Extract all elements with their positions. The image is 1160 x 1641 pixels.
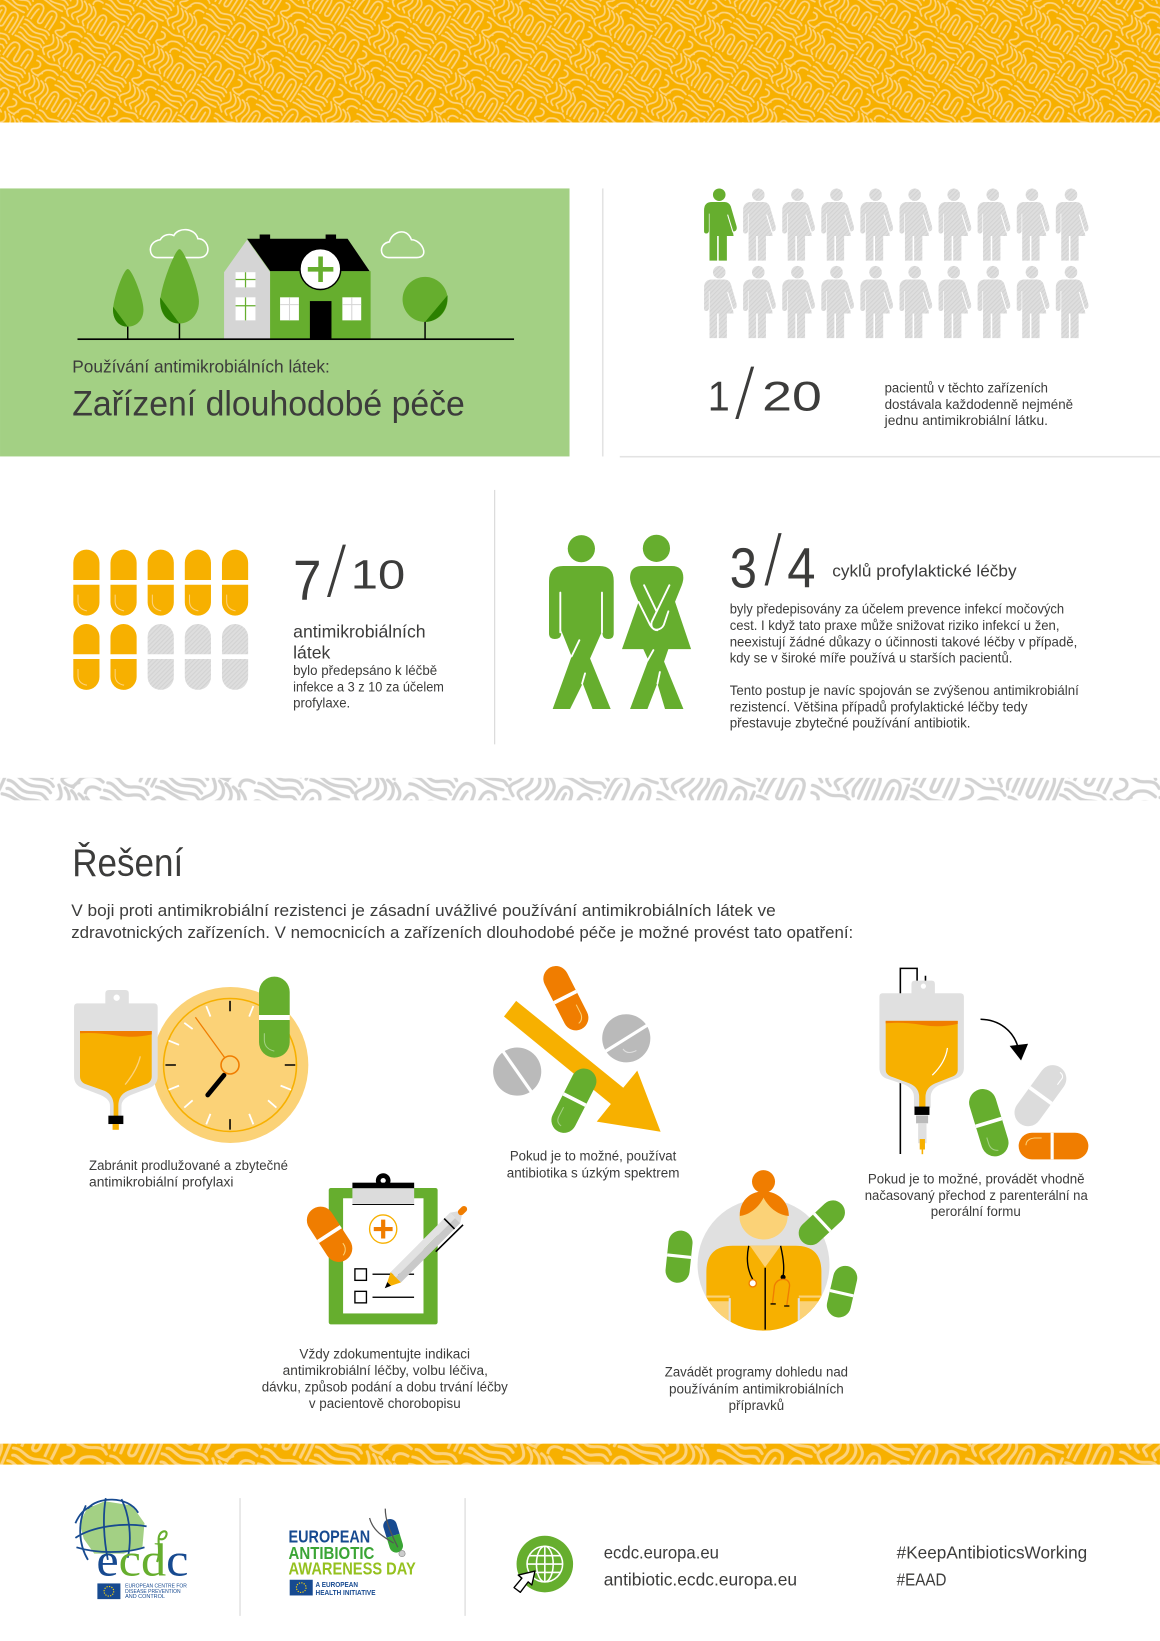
stat: 1/20: / [733,355,756,433]
logo: ECDC: AND CONTROL [125,1594,165,1600]
text: prophylaxis description: cest. I když tato praxe může snižovat riziko infekcí u žen, [730,617,1059,633]
icon: care home illustration [77,230,514,340]
title: Zařízení dlouhodobé péče [72,384,465,424]
pictogram: 7 of 10 pills [73,550,248,690]
icon: IV bag with clock [74,977,308,1143]
caption: stewardship: používáním antimikrobiálních [669,1380,844,1396]
stat: 7/10: 10 [351,551,405,597]
text: 7/10 description: látek [293,642,330,662]
caption: stewardship [665,1364,848,1413]
top pattern band [0,0,1160,122]
logo: ECDC: EUROPEAN CENTRE FOR [125,1584,187,1590]
text: 1/20 description [884,380,1073,428]
stat: 1/20: 1 [708,372,730,419]
stat: 7/10 [293,533,405,612]
stat: 7/10: / [325,533,348,611]
caption: narrow spectrum: antibiotika s úzkým spektrem [507,1164,679,1180]
stat: 3/4 [730,523,816,600]
text: web links: ecdc.europa.eu [604,1542,719,1562]
logo: ECDC: ecdc [96,1535,188,1586]
caption: documentation: antimikrobiální léčby, volbu léčiva, [283,1362,488,1378]
text: 7/10 description: profylaxe. [293,694,350,710]
caption: narrow spectrum: Pokud je to možné, používat [510,1148,676,1164]
text: web links: antibiotic.ecdc.europa.eu [604,1570,797,1590]
text: prophylaxis description: byly předepisovány za účelem prevence infekcí močových [730,600,1064,616]
text: prophylaxis description: neexistují žádné důkazy o účinnosti takové léčby v případě, [730,634,1077,650]
text: prophylaxis description: přestavuje zbytečné používání antibiotik. [730,715,970,731]
caption: prophylaxis [89,1157,288,1190]
text: 7/10 description: bylo předepsáno k léčbě [293,662,437,678]
stat: 3/4: 3 [730,536,757,600]
logo: European Antibiotic Awareness Day: AWARENESS DAY [289,1558,416,1578]
text: 1/20 description: pacientů v těchto zařízeních [885,380,1048,396]
text: hashtags: #EAAD [897,1570,946,1590]
caption: prophylaxis: Zabránit prodlužované a zbytečné [89,1157,288,1173]
logo: European Antibiotic Awareness Day: A EUROPEAN [316,1580,358,1589]
text: intro paragraph [71,901,853,942]
grey pattern band [0,778,1160,800]
caption: documentation: dávku, způsob podání a dobu trvání léčby [262,1379,508,1395]
orange pattern band [0,1444,1160,1465]
caption: IV to oral [865,1170,1088,1219]
icon: clipboard and pen [302,1173,471,1324]
caption: prophylaxis: antimikrobiální profylaxi [89,1174,233,1190]
icon: IV to oral switch [879,968,1088,1160]
text: intro paragraph: zdravotnických zařízeních. V nemocnicích a zařízeních dlouhodobé péče je možné provést tato opatření: [71,923,853,942]
logo: European Antibiotic Awareness Day [289,1509,416,1597]
text: 1/20 description: dostávala každodenně nejméně [885,396,1073,412]
text: 7/10 description: antimikrobiálních [293,621,426,641]
caption: IV to oral: Pokud je to možné, provádět vhodně [868,1170,1085,1186]
text: prophylaxis description [730,600,1079,731]
pictogram: 1 of 20 patients [704,188,1089,338]
icon: web globe with cursor [514,1536,573,1592]
caption: documentation [262,1345,508,1411]
caption: narrow spectrum [507,1148,679,1180]
text: intro paragraph: V boji proti antimikrobiální rezistenci je zásadní uvážlivé používání antimikrobiálních látek ve [71,901,776,920]
logo: ECDC [75,1498,188,1600]
text: prophylaxis description: kdy se v široké míře používá u starších pacientů. [730,650,1012,666]
icon: doctor with pills [664,1170,860,1335]
logo: European Antibiotic Awareness Day: ANTIBIOTIC [289,1543,374,1563]
logo: European Antibiotic Awareness Day: HEALTH INITIATIVE [316,1588,376,1597]
stat: 3/4: 4 [787,536,816,600]
text: hashtags [897,1542,1087,1590]
caption: IV to oral: perorální formu [931,1203,1021,1219]
text: prophylaxis description: Tento postup je navíc spojován se zvýšenou antimikrobiální [730,682,1079,698]
icon: narrow spectrum arrow and pills [483,962,661,1137]
stat: 3/4: / [763,523,783,599]
stat: 1/20: 20 [762,372,822,419]
stat: 1/20 [708,355,822,433]
caption: stewardship: přípravků [729,1397,784,1413]
caption: documentation: Vždy zdokumentujte indikaci [299,1345,470,1361]
caption: IV to oral: načasovaný přechod z parenterální na [865,1187,1088,1203]
logo: European Antibiotic Awareness Day: EUROPEAN [289,1527,370,1547]
text: hashtags: #KeepAntibioticsWorking [897,1542,1087,1562]
icon: man and woman figures [549,535,691,709]
text: 1/20 description: jednu antimikrobiální látku. [884,412,1048,428]
stat: 7/10: 7 [293,549,321,612]
text: 7/10 description: infekce a 3 z 10 za účelem [293,678,444,694]
text: prophylaxis description: rezistencí. Většina případů profylaktické léčby tedy [730,699,1028,715]
caption: documentation: v pacientově chorobopisu [309,1395,461,1411]
heading: prophylaxis cycles: cyklů profylaktické léčby [832,561,1017,580]
caption: stewardship: Zavádět programy dohledu nad [665,1364,848,1380]
heading: Řešení: Řešení [72,842,183,885]
text: web links [604,1542,797,1590]
subtitle: Používání antimikrobiálních látek: [72,357,330,377]
logo: ECDC: DISEASE PREVENTION [125,1589,181,1595]
panel: title [0,188,570,456]
text: 7/10 description [293,621,444,710]
